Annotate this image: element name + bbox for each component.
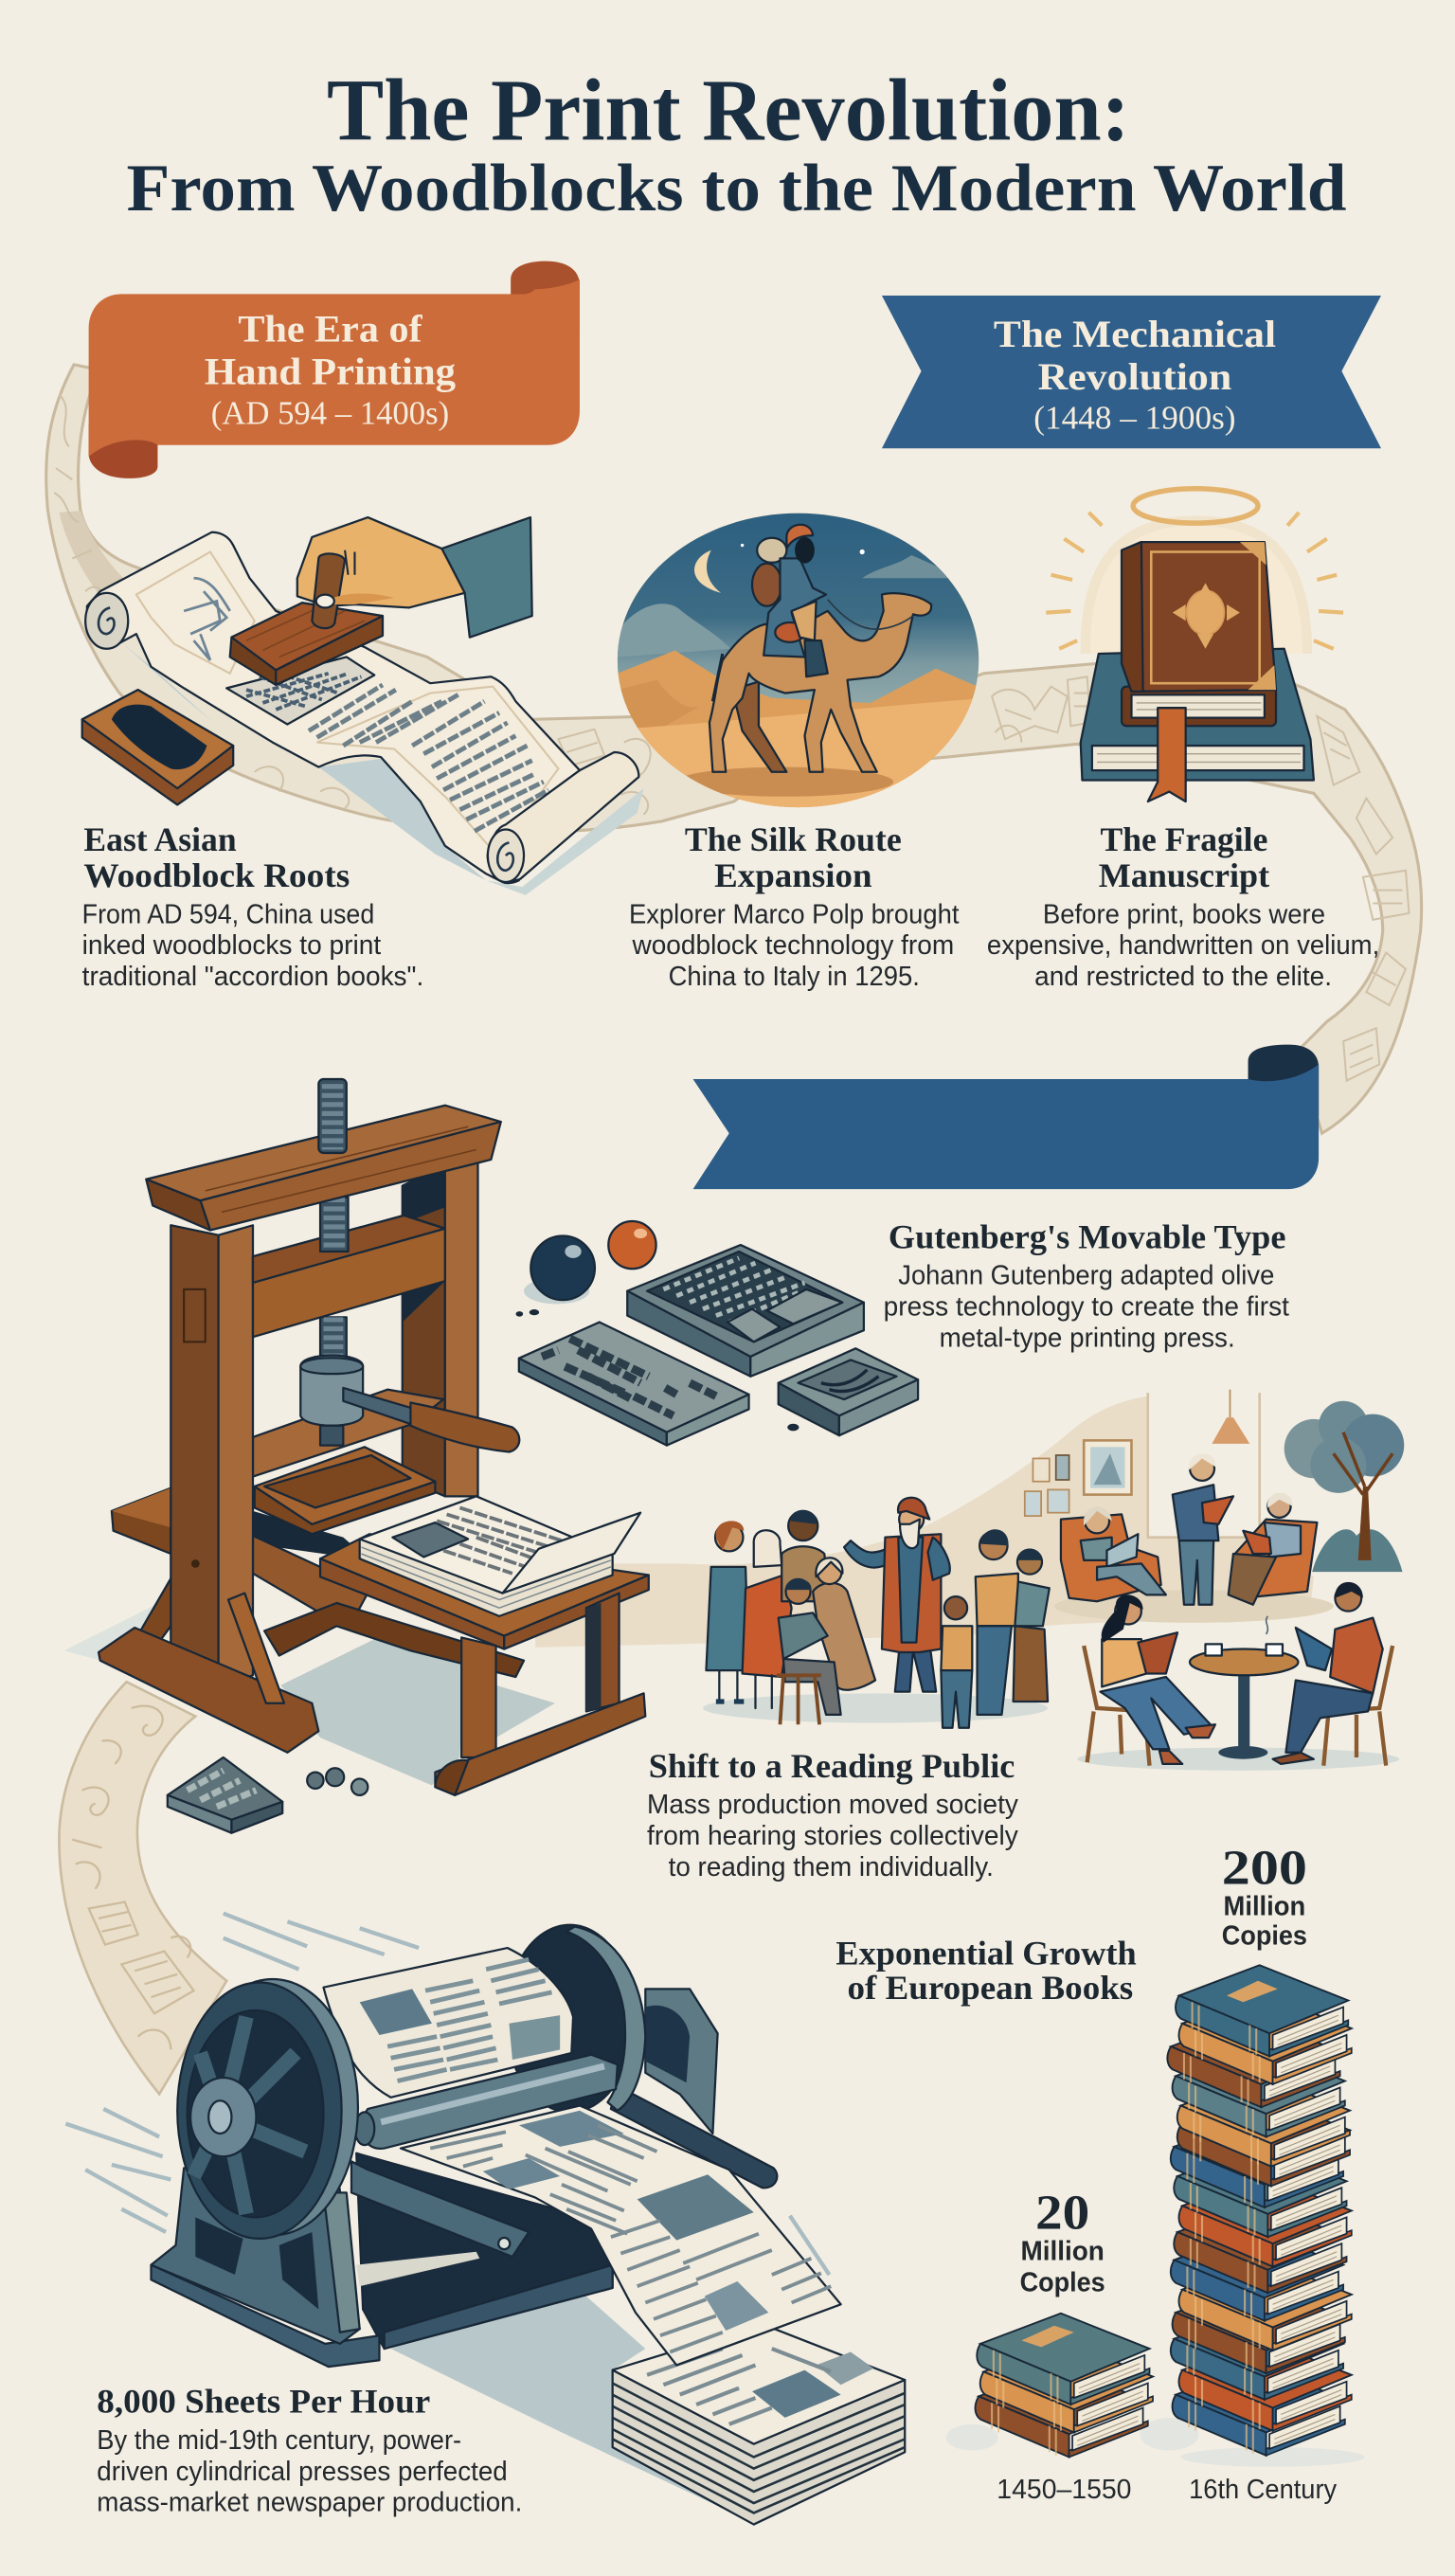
brown man bbox=[781, 1510, 829, 1601]
banner: The Mechanical Revolution: (1448 – 1900s) bbox=[1033, 400, 1236, 436]
stat: 200 million copies: 200 bbox=[1222, 1841, 1307, 1895]
illustration: shift to a reading public bbox=[703, 1401, 1404, 1771]
block text: East Asian Woodblock Roots: From AD 594, China used bbox=[82, 899, 374, 929]
orange woman bbox=[743, 1530, 792, 1708]
illustration: reading public backdrop bbox=[535, 1390, 1314, 1648]
illustration: camel on the Silk Route bbox=[618, 513, 985, 821]
title: From Woodblocks to the Modern World bbox=[126, 152, 1347, 225]
speed lines bbox=[65, 1914, 829, 2275]
newspaper stack bbox=[613, 2324, 905, 2525]
stat: 200 million copies: Million bbox=[1224, 1891, 1305, 1921]
sleeve bbox=[441, 517, 532, 638]
illustration: cylindrical newspaper press bbox=[65, 1914, 905, 2525]
block text: East Asian Woodblock Roots: Woodblock Roots bbox=[83, 856, 350, 894]
right back post bbox=[403, 1158, 477, 1496]
robed speaker bbox=[844, 1498, 950, 1692]
block text: East Asian Woodblock Roots bbox=[82, 820, 423, 992]
flywheel bbox=[177, 1979, 358, 2239]
banner: The Era of Hand Printing: (AD 594 – 1400s) bbox=[211, 395, 449, 431]
paper sheet bbox=[401, 2105, 841, 2365]
block text: Gutenberg's Movable Type: metal-type printing press. bbox=[940, 1324, 1235, 1354]
block text: Shift to a Reading Public: to reading them individually. bbox=[669, 1852, 994, 1882]
left frame bbox=[152, 2168, 360, 2344]
illustration: Gutenberg wooden press bbox=[64, 1079, 649, 1795]
illustration: fragile manuscript on books bbox=[1046, 489, 1343, 802]
paper cylinder bbox=[324, 1948, 573, 2098]
left front post bbox=[171, 1216, 445, 1686]
title bbox=[126, 62, 1347, 225]
block text: 8,000 Sheets Per Hour: mass-market newspaper production. bbox=[97, 2488, 522, 2518]
brown book bbox=[1122, 542, 1276, 726]
armchair reader bbox=[1061, 1506, 1166, 1601]
press handle bbox=[343, 1388, 519, 1452]
heading: Exponential Growth of European Books: of European Books bbox=[848, 1969, 1133, 2007]
block text: Shift to a Reading Public: Mass production moved society bbox=[647, 1790, 1019, 1820]
block text: The Fragile Manuscript: Before print, books were bbox=[1043, 899, 1325, 929]
feet and struts bbox=[99, 1578, 468, 1795]
type block right bbox=[779, 1348, 918, 1435]
block text: The Silk Route Expansion: Expansion bbox=[714, 856, 872, 894]
banner: The Era of Hand Printing bbox=[89, 261, 580, 478]
large type tray bbox=[627, 1245, 864, 1377]
block text: The Fragile Manuscript: The Fragile bbox=[1101, 820, 1267, 858]
lower roller bbox=[354, 2055, 618, 2149]
scroll shadows bbox=[123, 644, 644, 895]
blue woman bbox=[706, 1521, 749, 1702]
woman reading bbox=[1101, 1594, 1215, 1764]
chart: short book stack bbox=[946, 2314, 1153, 2457]
block text: The Silk Route Expansion: China to Italy in 1295. bbox=[669, 962, 920, 992]
lounge readers bbox=[1054, 1453, 1334, 1623]
rider bbox=[752, 525, 913, 676]
heading: Exponential Growth of European Books: Exponential Growth bbox=[835, 1934, 1137, 1972]
type tray left bbox=[519, 1323, 749, 1446]
paper scroll bbox=[85, 532, 638, 883]
title: The Print Revolution: bbox=[327, 62, 1130, 159]
boy bbox=[1014, 1549, 1050, 1702]
far side frame bbox=[645, 1989, 718, 2134]
block text: Shift to a Reading Public: from hearing stories collectively bbox=[647, 1821, 1019, 1851]
stat: 200 million copies: Copies bbox=[1222, 1921, 1307, 1952]
stat: 20 million copies: 20 bbox=[1035, 2187, 1089, 2241]
axis label: 1450–1550: 1450–1550 bbox=[997, 2475, 1131, 2505]
block text: East Asian Woodblock Roots: traditional "accordion books". bbox=[82, 962, 423, 992]
right chair bbox=[1323, 1646, 1392, 1766]
banner: The Era of Hand Printing: The Era of bbox=[238, 308, 422, 351]
cafe readers bbox=[1077, 1582, 1399, 1771]
tree bbox=[1284, 1401, 1404, 1572]
under frame and base bbox=[152, 2153, 613, 2367]
scroll end roller bbox=[488, 752, 638, 881]
stat: 200 million copies bbox=[1222, 1841, 1307, 1952]
stat: 20 million copies: Coples bbox=[1020, 2267, 1105, 2297]
banner: The Mechanical Revolution: Revolution bbox=[1038, 355, 1231, 398]
block text: 8,000 Sheets Per Hour: driven cylindrical presses perfected bbox=[97, 2457, 508, 2487]
block text: The Fragile Manuscript: Manuscript bbox=[1099, 856, 1269, 894]
ink tray bbox=[82, 690, 233, 804]
seated listener bbox=[777, 1578, 841, 1724]
chart: tall book stack bbox=[1140, 1965, 1365, 2467]
bookmark ribbon bbox=[1148, 708, 1186, 802]
block text: The Silk Route Expansion: Explorer Marco Polp brought bbox=[629, 899, 959, 929]
hand gripping handle bbox=[297, 517, 465, 628]
banner: The Era of Hand Printing: Hand Printing bbox=[205, 351, 456, 393]
standing reader bbox=[1173, 1453, 1233, 1605]
illustration: woodblock and scroll bbox=[82, 517, 644, 895]
block text: Gutenberg's Movable Type: Gutenberg's Movable Type bbox=[889, 1218, 1285, 1256]
stat: 20 million copies: Million bbox=[1020, 2236, 1105, 2266]
illustration: metal type and ink balls bbox=[168, 1221, 918, 1833]
table wings bbox=[112, 1488, 649, 1795]
block text: Gutenberg's Movable Type: press technology to create the first bbox=[884, 1292, 1289, 1323]
banner: The Mechanical Revolution bbox=[882, 296, 1381, 448]
printed sheets on table bbox=[360, 1496, 640, 1616]
block text: East Asian Woodblock Roots: East Asian bbox=[83, 820, 237, 858]
block text: The Fragile Manuscript bbox=[987, 820, 1379, 992]
block text: 8,000 Sheets Per Hour bbox=[97, 2383, 522, 2518]
block text: The Silk Route Expansion: woodblock technology from bbox=[631, 930, 954, 961]
right rim bbox=[506, 1925, 645, 2112]
back arm bbox=[611, 2086, 777, 2188]
block text: Shift to a Reading Public bbox=[647, 1747, 1019, 1882]
man reading bbox=[1273, 1582, 1383, 1764]
left chair bbox=[1084, 1646, 1150, 1766]
small type near base bbox=[168, 1757, 368, 1833]
blue book bbox=[1081, 649, 1314, 780]
block text: Shift to a Reading Public: Shift to a Reading Public bbox=[649, 1747, 1015, 1785]
parchment timeline band: upper bbox=[46, 365, 1422, 1133]
block text: The Silk Route Expansion bbox=[629, 820, 959, 992]
cafe table bbox=[1190, 1616, 1298, 1759]
block text: 8,000 Sheets Per Hour: By the mid-19th century, power- bbox=[97, 2425, 461, 2456]
old woman bbox=[813, 1558, 875, 1690]
banner: empty blue ribbon bbox=[693, 1045, 1319, 1189]
parchment timeline band: lower bbox=[59, 1682, 226, 2094]
block text: The Silk Route Expansion: The Silk Route bbox=[685, 820, 902, 858]
woodblock stamp bbox=[230, 603, 383, 685]
heading: Exponential Growth of European Books bbox=[835, 1934, 1137, 2007]
axis label: 16th Century: 16th Century bbox=[1189, 2475, 1338, 2505]
block text: Gutenberg's Movable Type bbox=[884, 1218, 1289, 1354]
camel bbox=[732, 681, 786, 772]
armchair reader two bbox=[1229, 1493, 1317, 1605]
front arm bbox=[351, 2161, 529, 2257]
block text: The Fragile Manuscript: expensive, handwritten on velium, bbox=[987, 930, 1379, 961]
block text: Gutenberg's Movable Type: Johann Gutenberg adapted olive bbox=[898, 1261, 1274, 1291]
screw and platen bbox=[253, 1317, 443, 1534]
storytelling group bbox=[703, 1498, 1050, 1728]
stat: 20 million copies bbox=[1020, 2187, 1105, 2297]
man in orange bbox=[976, 1529, 1018, 1715]
ink balls bbox=[516, 1221, 656, 1317]
block text: 8,000 Sheets Per Hour: 8,000 Sheets Per Hour bbox=[97, 2383, 430, 2421]
block text: East Asian Woodblock Roots: inked woodblocks to print bbox=[82, 930, 381, 961]
block text: The Fragile Manuscript: and restricted to the elite. bbox=[1034, 962, 1332, 992]
top beam and screw bbox=[146, 1079, 501, 1252]
banner: The Mechanical Revolution: The Mechanical bbox=[994, 313, 1276, 355]
small child bbox=[941, 1596, 972, 1728]
